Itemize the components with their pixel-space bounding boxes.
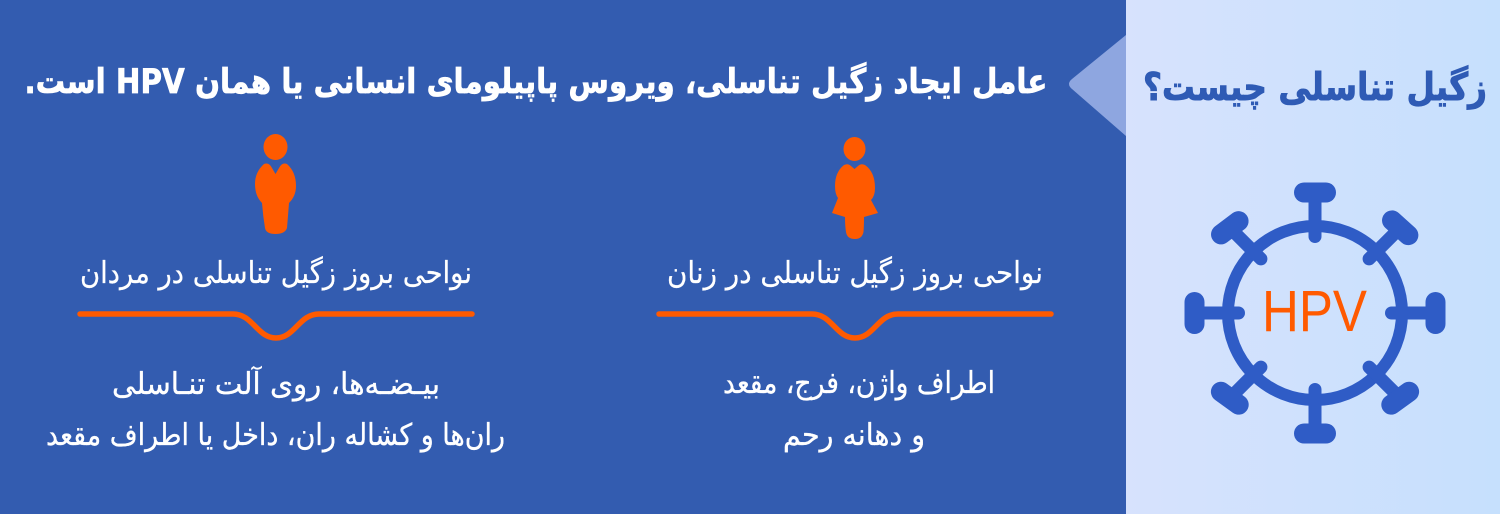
arrow: pointer triangle [1069,35,1126,136]
icon: woman [832,137,878,239]
background panel: main blue [0,0,1126,514]
icon: man [255,134,296,234]
text block: men areas: ران‌ها و کشاله ران، داخل یا اطراف مقعد [46,418,505,453]
text block: women areas: اطراف واژن، فرج، مقعد [723,366,995,401]
text block: women areas [723,366,995,453]
text block: men areas [46,366,505,453]
icon: HPV virus [1184,182,1446,444]
divider curve: women [659,314,1051,338]
text block: men areas: بیـضـه‌ها، روی آلت تنـاسلی [112,366,440,402]
panel: question sidebar [1126,0,1500,514]
text block: women areas: و دهانه رحم [783,418,925,453]
heading: areas in men: نواحی بروز زگیل تناسلی در مردان [80,256,472,291]
heading: areas in women: نواحی بروز زگیل تناسلی در زنان [667,256,1043,291]
divider curve: men [80,314,472,338]
icon: HPV virus: HPV [1262,279,1367,344]
title: cause of genital warts: عامل ایجاد زگیل تناسلی، ویروس پاپیلومای انسانی یا همان HPV است. [25,62,1048,102]
